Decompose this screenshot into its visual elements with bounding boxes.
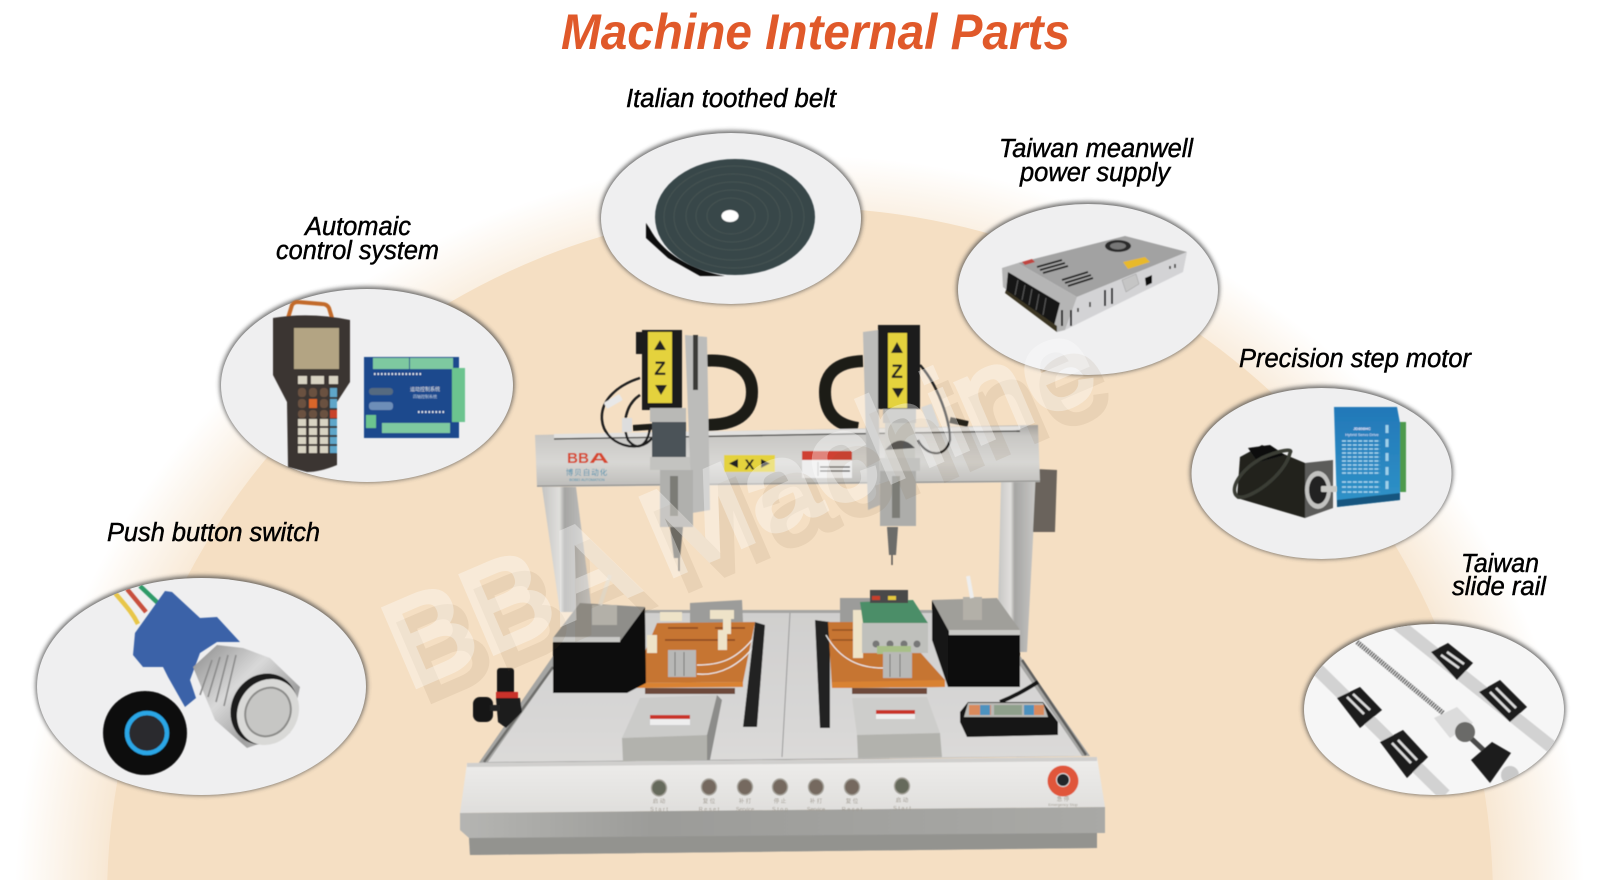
label: Taiwan meanwell power supply	[999, 135, 1194, 187]
label: Automaic control system	[276, 213, 439, 265]
watermark: BBA Machine	[379, 305, 1129, 729]
icon: illuminated black button	[103, 691, 187, 775]
front panel	[460, 757, 1105, 855]
left fixture	[632, 600, 755, 694]
right black box	[932, 576, 1020, 687]
label: Precision step motor: Precision step motor	[1239, 345, 1472, 373]
machine gantry legs	[542, 469, 1057, 652]
control buttons: S t o p	[772, 807, 788, 813]
right fixture	[826, 590, 945, 694]
right cable chain	[815, 620, 830, 728]
control buttons: Service	[807, 807, 825, 813]
air regulator	[473, 668, 522, 728]
icon: step motor	[1234, 445, 1337, 518]
emergency stop button: 急 停	[1057, 795, 1070, 803]
BBA logo: BOBEI AUTOMATION	[569, 478, 605, 482]
panel: push button switch	[36, 576, 368, 796]
Z head right: Z	[891, 362, 903, 383]
BBA logo	[566, 450, 609, 482]
icon: metal push button	[115, 586, 311, 757]
machine cable chains	[633, 361, 968, 428]
control buttons	[650, 778, 911, 813]
machine table	[478, 610, 1090, 764]
panel: control system	[220, 286, 514, 482]
icon: control board: 四轴控制系统	[413, 393, 437, 399]
panel: step motor	[1190, 386, 1453, 560]
label: Italian toothed belt: Italian toothed belt	[626, 85, 837, 113]
control buttons: 停 止	[774, 797, 787, 805]
icon: power supply unit	[1002, 236, 1187, 332]
label: Taiwan slide rail: slide rail	[1452, 573, 1547, 601]
title: Machine Internal Parts	[561, 4, 1070, 60]
label: Taiwan meanwell power supply: power supply	[1019, 159, 1172, 187]
X axis sticker	[724, 455, 775, 474]
icon: servo driver	[1334, 407, 1406, 507]
right silver box	[852, 697, 942, 758]
control buttons: Service	[736, 807, 754, 813]
Z head right	[863, 325, 950, 565]
control buttons: 补 打	[810, 797, 823, 805]
panel: power supply	[956, 202, 1220, 376]
icon: control board: 运动控制系统	[410, 386, 440, 393]
control buttons: S t a r t	[893, 806, 911, 812]
machine X beam	[535, 425, 1040, 487]
panel: slide rail	[1302, 622, 1566, 796]
BBA logo: A	[589, 450, 609, 467]
control buttons: S t a r t	[650, 807, 668, 813]
icon: linear rails and ball screw	[1310, 622, 1558, 795]
watermark: BBA Machine	[364, 290, 1114, 714]
panel: toothed belt	[600, 130, 862, 304]
icon: servo driver: Hybrid Servo Drive	[1345, 432, 1380, 437]
emergency stop button: Emergency Stop	[1048, 802, 1079, 807]
BBA logo: BB	[567, 450, 589, 467]
icon: belt coil	[646, 159, 815, 276]
X axis sticker: X	[744, 456, 755, 474]
machine	[460, 325, 1105, 855]
control buttons: 补 打	[739, 797, 752, 805]
label: Automaic control system: Automaic	[303, 213, 411, 241]
warning sticker	[802, 451, 852, 478]
BBA logo: 博贝自动化	[566, 467, 608, 477]
background dome	[107, 207, 1493, 880]
icon: servo driver: JD808HC	[1353, 426, 1371, 431]
icon: handheld pendant	[273, 302, 350, 472]
control buttons: 启 动	[896, 796, 909, 804]
label: Taiwan slide rail	[1452, 550, 1547, 601]
Z head left: Z	[654, 359, 666, 380]
control buttons: 启 动	[653, 797, 666, 805]
label: Taiwan slide rail: Taiwan	[1461, 550, 1539, 578]
label: Automaic control system: control system	[276, 237, 439, 265]
Z head left	[602, 330, 710, 571]
left cable chain	[743, 622, 765, 727]
control buttons: R e s e t	[842, 807, 863, 813]
left silver box	[622, 695, 722, 762]
label: Push button switch: Push button switch	[107, 519, 320, 547]
left black box	[553, 575, 646, 693]
emergency stop button	[1048, 766, 1079, 807]
control buttons: 复 位	[703, 797, 716, 805]
hand controller	[960, 682, 1058, 737]
control buttons: R e s e t	[699, 807, 720, 813]
label: Taiwan meanwell power supply: Taiwan meanwell	[999, 135, 1194, 163]
icon: control board	[364, 357, 465, 438]
control buttons: 复 位	[846, 797, 859, 805]
